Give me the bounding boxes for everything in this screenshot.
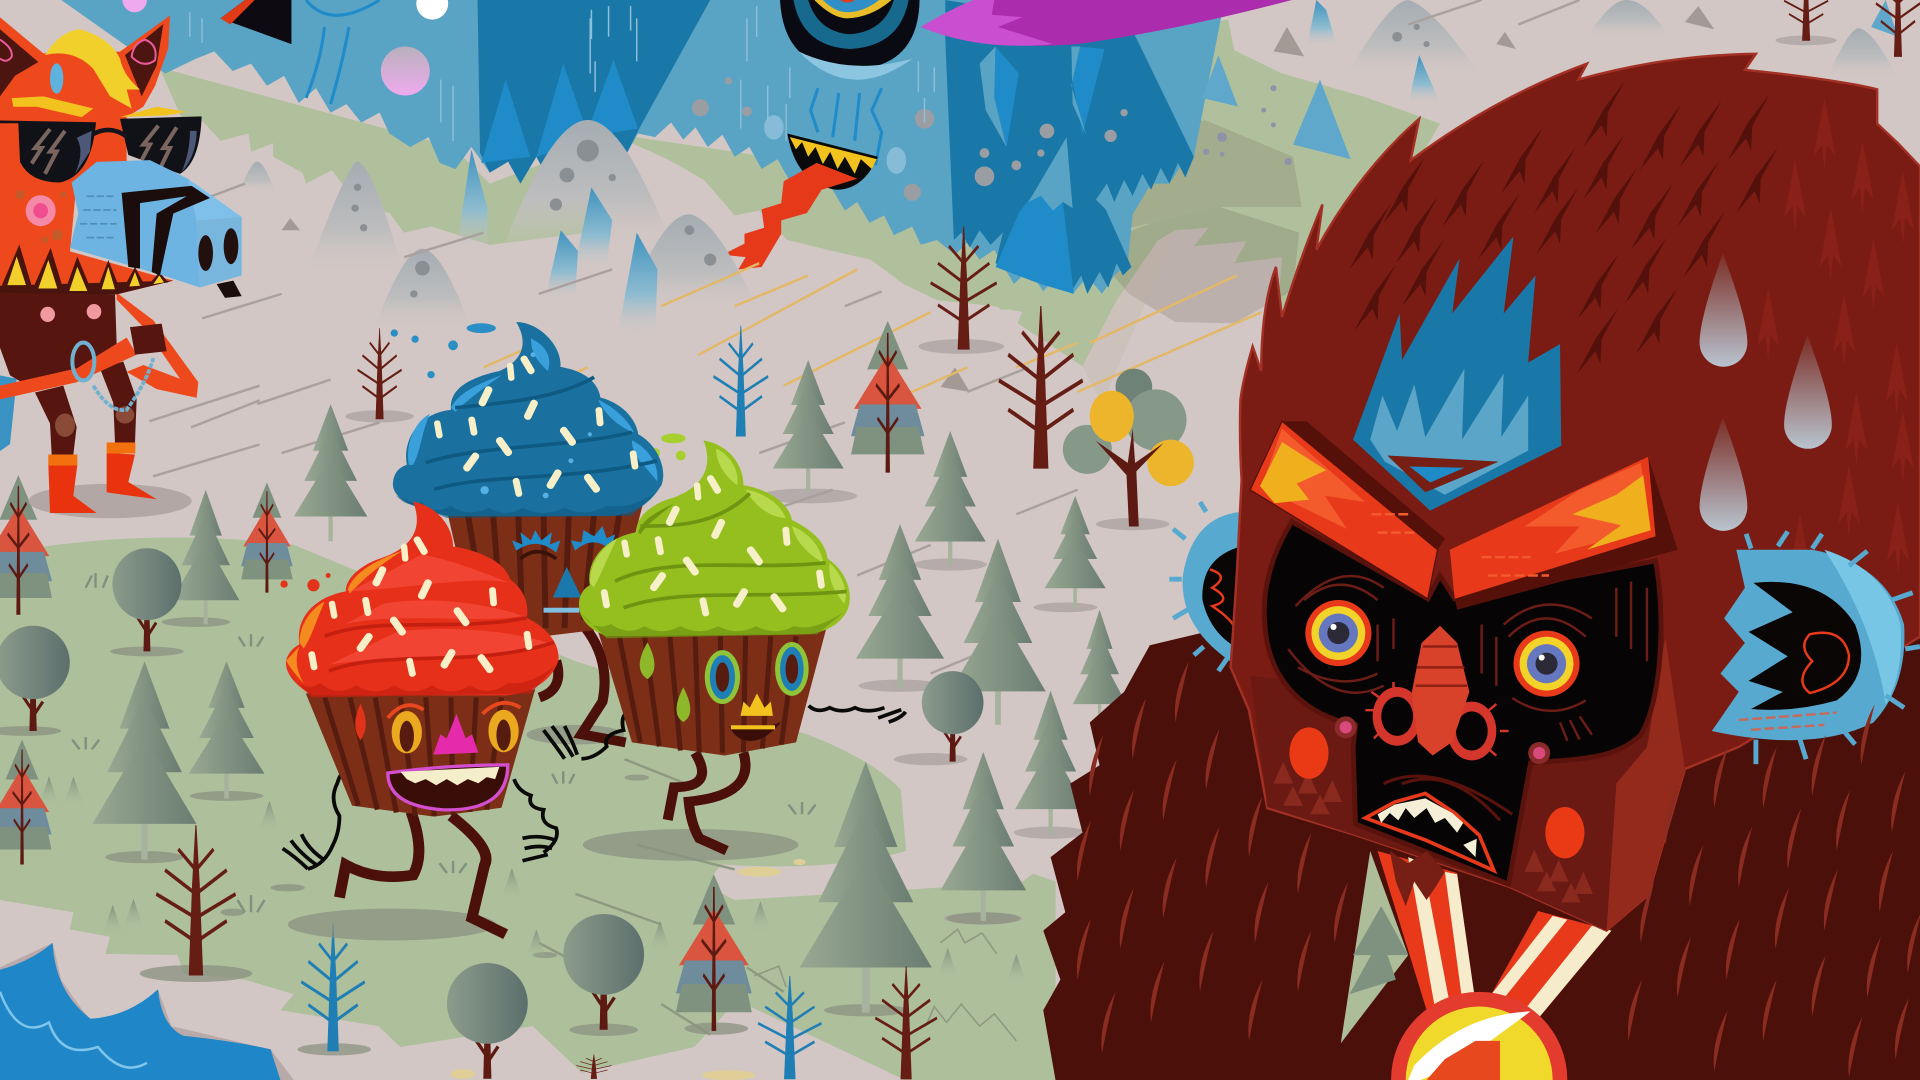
grey dots on mountains [692,77,1128,201]
boar tail [0,375,17,451]
panel: green hills top right [943,20,1440,480]
tree: red and blue pine group [0,321,924,1031]
bright spires [481,47,1104,294]
eye wrinkles [1288,576,1647,741]
target eye [780,0,920,165]
right eye [1513,631,1580,697]
boar sunglasses [0,116,202,182]
dark blue peak left [478,0,710,184]
tree seen through the gap [1341,851,1408,1043]
spatter dots [280,323,686,591]
character: red, blue and green cupcakes [280,322,905,940]
tree shadows [345,36,1837,924]
boar snout [70,160,242,298]
panel: green meadow [0,537,1056,1080]
boar shadow [28,484,192,518]
light crystal streaks [980,47,1086,211]
tree: bare blue group [301,326,822,1079]
sasquatch black mask [1264,522,1661,884]
rain marks [190,6,934,141]
black mouth creature with red tongue [722,133,878,269]
boar head [0,15,173,294]
tree: autumn tree [1063,369,1194,527]
white ball [416,0,448,20]
mohawk [1353,236,1561,511]
right ear [1712,531,1920,764]
jellyfish tendrils [306,0,380,104]
dark blue peak right [945,0,1194,294]
meadow tree shadows [0,617,1020,1056]
cheeks [1289,716,1584,858]
tree: pine group [92,360,1127,1013]
purple shape [921,0,1292,46]
sweat drops [1700,253,1832,531]
sasquatch head fur [1231,54,1920,931]
head fur tall marks [1757,98,1914,588]
pink path patch [713,722,1065,900]
head fur dark marks [1349,81,1778,373]
body fur slashes [1077,661,1920,1078]
left ear [1169,502,1255,676]
red cupcake [283,502,559,934]
grass tufts [72,573,816,912]
lower face block [1250,637,1685,931]
yellow puddles [451,859,806,1080]
small pink ball [122,0,147,12]
nose [1365,626,1509,760]
medal ribbons [1378,851,1611,1019]
left eye [1305,600,1371,666]
boar necklace [0,244,173,294]
black triangle creature [220,0,291,44]
ground cones [38,776,1027,986]
panel: green zigzag band [159,67,1102,321]
tree: round group [0,548,984,1079]
boar ears [0,24,163,96]
cupcake shadows [288,725,798,940]
chin fur [1390,851,1445,906]
brows [1250,421,1678,610]
mouth [1365,776,1512,871]
boar markings [12,63,187,243]
ground streaks [149,0,1580,1041]
medal [1391,992,1567,1080]
boar legs and boots [35,362,157,513]
character: boar with sunglasses [0,15,242,518]
grey mounds and crystals [239,0,1898,392]
boar hair [45,29,140,108]
character: sasquatch [1043,54,1920,1080]
boar body [0,289,117,389]
panel: blue mountains [61,0,1224,294]
boar arms and handcuffs [0,293,198,410]
water waves [0,943,294,1080]
light blue mountain range [61,0,1224,294]
pink ball [381,47,430,96]
green cupcake [544,440,905,851]
sasquatch dark body [1043,612,1920,1080]
blue cupcake [393,322,663,742]
